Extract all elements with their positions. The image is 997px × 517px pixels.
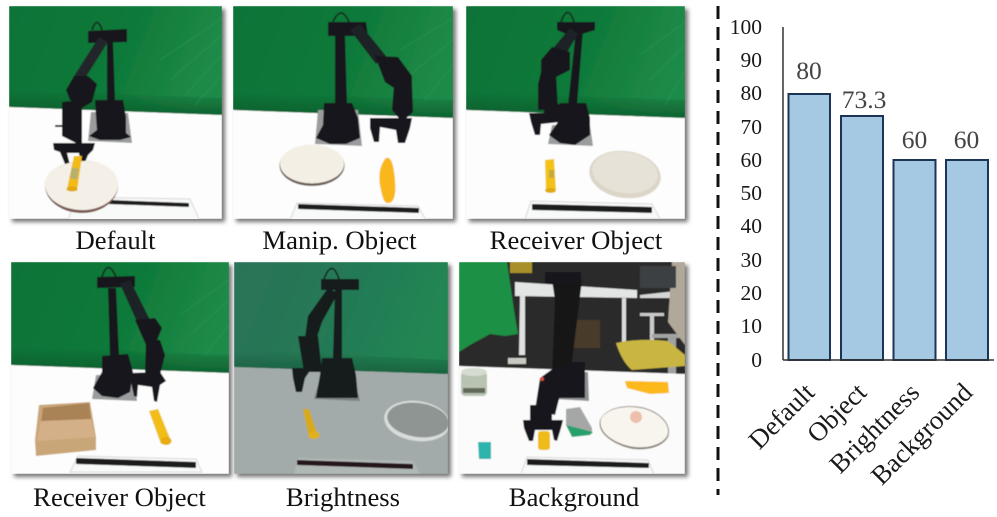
value labels: 60 — [954, 125, 979, 154]
y-axis tick labels: 30 — [740, 248, 762, 272]
y-axis tick labels: 20 — [740, 281, 762, 305]
x-axis category labels: Background — [865, 377, 979, 490]
x-axis category labels — [742, 377, 979, 490]
y-axis tick labels: 80 — [740, 81, 762, 105]
y-axis tick labels: 100 — [730, 15, 762, 39]
y-axis tick labels: 60 — [740, 148, 762, 172]
y-axis tick labels — [730, 15, 762, 372]
value labels: 73.3 — [842, 85, 886, 114]
panel: cluttered background scene photo — [459, 262, 688, 477]
caption: Manip. Object: Manip. Object — [262, 225, 417, 255]
y-axis tick labels: 50 — [740, 181, 762, 205]
y-axis tick labels: 0 — [751, 348, 762, 372]
caption: Default: Default — [75, 225, 156, 255]
axes — [783, 27, 994, 360]
y-axis tick labels: 90 — [740, 48, 762, 72]
value labels — [796, 56, 979, 154]
panel: default scene photo — [9, 6, 225, 222]
panel: manipulated object scene photo — [233, 6, 456, 222]
caption: Background: Background — [509, 482, 640, 512]
bars — [788, 94, 988, 360]
y-axis tick labels: 10 — [740, 314, 762, 338]
bar chart: scores by condition — [730, 15, 994, 490]
y-axis tick labels: 70 — [740, 115, 762, 139]
x-axis category labels: Object — [801, 377, 873, 449]
panel: receiver object scene photo with plate — [466, 6, 688, 222]
panel: receiver object scene photo with box — [11, 262, 232, 477]
caption: Receiver Object (top): Receiver Object — [490, 225, 663, 255]
x-axis category labels: Brightness — [823, 377, 925, 479]
caption: Brightness: Brightness — [286, 482, 400, 512]
value labels: 80 — [796, 56, 822, 85]
panel: low brightness scene photo — [234, 262, 452, 477]
y-axis tick labels: 40 — [740, 214, 762, 238]
vertical dashed divider — [716, 6, 720, 495]
caption: Receiver Object (bottom): Receiver Object — [33, 482, 206, 512]
value labels: 60 — [902, 125, 927, 154]
x-axis category labels: Default — [742, 377, 821, 455]
